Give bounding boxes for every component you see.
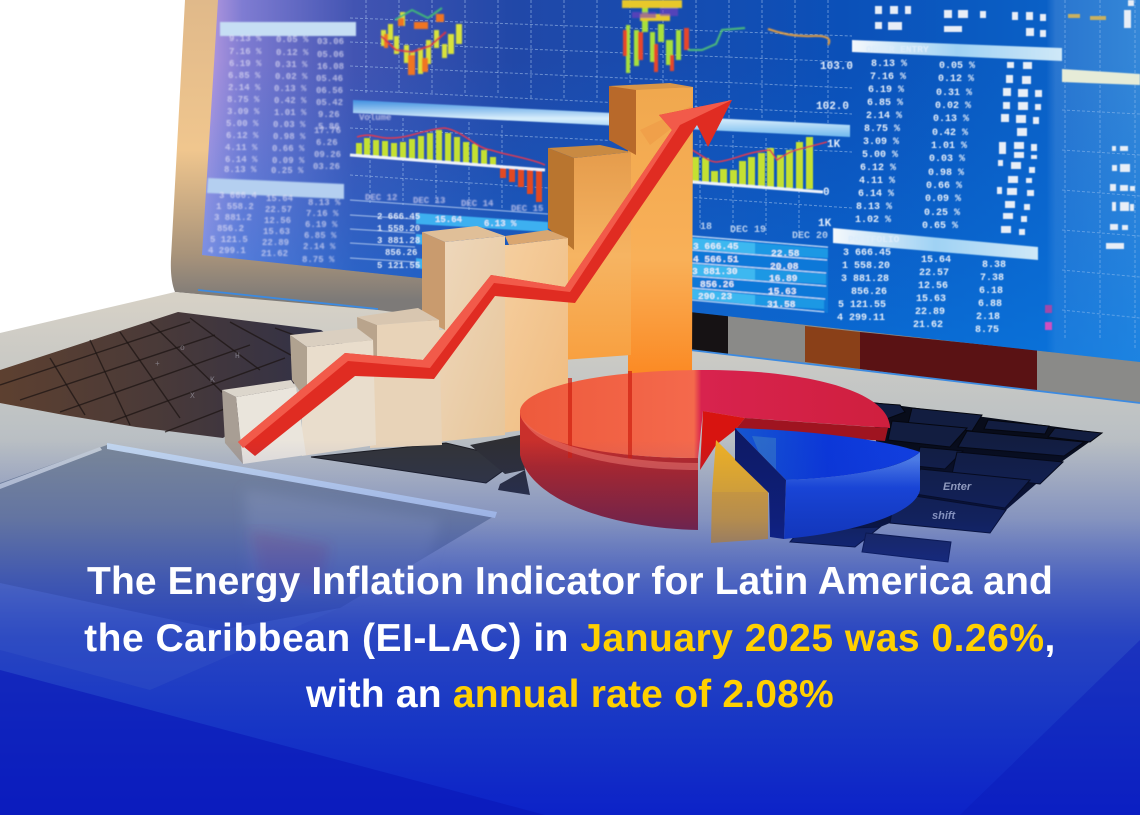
- trackpad: [0, 443, 497, 630]
- side table column: 0.09 %: [272, 156, 305, 166]
- order entry panel: 0.05 %: [939, 61, 975, 72]
- order entry panel: 0.98 %: [928, 168, 964, 179]
- side table column: 0.98 %: [273, 132, 306, 142]
- order entry panel: 8.13 %: [856, 202, 892, 213]
- side table column: 6.14 %: [225, 155, 258, 165]
- side table column: 1.01 %: [274, 108, 307, 118]
- side table column: 8.13 %: [308, 198, 341, 208]
- portfolio panel: 6.88: [978, 299, 1002, 310]
- side table column: 21.62: [261, 249, 288, 259]
- yellow slice: [711, 440, 768, 543]
- cyan data rows: 290.23: [698, 291, 733, 302]
- portfolio panel: 21.62: [913, 320, 943, 331]
- overlay diagonal facets: [0, 583, 1140, 815]
- side table column: 6.19 %: [229, 59, 262, 69]
- order entry panel: 5.00 %: [862, 150, 898, 161]
- portfolio panel: 8.38: [982, 260, 1006, 271]
- cyan data rows: 5 121.55: [377, 261, 420, 271]
- portfolio panel: 4 299.11: [837, 313, 885, 324]
- side table column: 4.11 %: [225, 143, 258, 153]
- keyboard left: [0, 312, 345, 438]
- headline: the Caribbean (EI-LAC) in January 2025 was 0.26%,: [84, 616, 1056, 660]
- portfolio panel: 3 666.45: [843, 248, 891, 259]
- portfolio panel: [833, 228, 1038, 336]
- side table column: 2.14 %: [228, 83, 261, 93]
- side table column: 22.57: [265, 205, 292, 215]
- portfolio panel: 8.75: [975, 325, 999, 336]
- side table column: 1 558.2: [216, 202, 254, 212]
- volume bar chart: [350, 128, 827, 202]
- side table column: 09.26: [314, 150, 341, 160]
- cyan data rows: 3 881.28: [377, 236, 420, 246]
- order entry panel: 3.09 %: [863, 137, 899, 148]
- axis labels: 103.0: [820, 61, 853, 73]
- order entry panel: 6.19 %: [868, 85, 904, 96]
- side table column: 06.56: [316, 86, 343, 96]
- axis labels: 102.0: [816, 101, 849, 113]
- cyan data rows: 15.64: [435, 215, 463, 225]
- portfolio panel: PORTFOLIO: [848, 234, 900, 245]
- side table column: 12.56: [264, 216, 291, 226]
- pie chart: [520, 370, 920, 543]
- axis labels: DEC 12: [365, 193, 397, 203]
- side table column: 16.08: [317, 62, 344, 72]
- portfolio panel: 15.63: [916, 294, 946, 305]
- bar 3: [357, 308, 442, 448]
- order entry panel: [852, 0, 1140, 330]
- side table column: 3 881.2: [214, 213, 252, 223]
- cyan data rows: 3 881.30: [692, 266, 738, 277]
- rising red arrow: [238, 100, 732, 456]
- order entry panel: 0.03 %: [929, 154, 965, 165]
- laptop lid: [171, 0, 1140, 420]
- order entry panel: 6.85 %: [867, 98, 903, 109]
- cyan data rows: 2 666.45: [377, 212, 420, 222]
- portfolio panel: 3 881.28: [841, 274, 889, 285]
- side table column: 9.13 %: [229, 34, 262, 44]
- side table column: 6.26: [316, 138, 338, 148]
- order entry panel: 4.11 %: [859, 176, 895, 187]
- axis labels: DEC 13: [413, 196, 445, 206]
- headline: The Energy Inflation Indicator for Latin America and: [87, 560, 1053, 603]
- side table column: 8.75 %: [302, 255, 335, 265]
- order entry panel: 0.09 %: [925, 194, 961, 205]
- portfolio panel: 856.26: [851, 287, 887, 298]
- cyan data rows: 6.13 %: [484, 219, 517, 229]
- order entry panel: 0.02 %: [935, 101, 971, 112]
- side table column: 8.75 %: [227, 95, 260, 105]
- candlestick clusters: [381, 0, 829, 75]
- side table column: 2.14 %: [303, 242, 336, 252]
- headline: with an annual rate of 2.08%: [306, 673, 834, 716]
- order entry panel: 8.13 %: [871, 59, 907, 70]
- keyboard spacebar: [311, 443, 518, 483]
- portfolio panel: 1 558.20: [842, 261, 890, 272]
- divider band: [353, 100, 850, 137]
- keyboard right: [790, 402, 1102, 547]
- bar 7: [609, 83, 693, 374]
- order entry panel: 8.75 %: [864, 124, 900, 135]
- side table column: 6.19 %: [305, 220, 338, 230]
- reflection band under screen: [690, 310, 1140, 403]
- side table column: 5 121.5: [210, 235, 248, 245]
- laptop base: [0, 292, 1140, 815]
- bar 4: [422, 226, 505, 442]
- order entry panel: 6.12 %: [860, 163, 896, 174]
- axis labels: Volume: [359, 113, 391, 123]
- keyboard left: H: [235, 352, 240, 361]
- keyboard right: Enter: [943, 481, 972, 493]
- chart grid: [350, 0, 1140, 350]
- laptop screen: [202, 0, 1140, 362]
- bar 6: [548, 145, 631, 360]
- side table column: 9.26: [318, 110, 340, 120]
- side table column: 856.2: [217, 224, 244, 234]
- order entry panel: 0.25 %: [924, 208, 960, 219]
- cyan data rows: 20.08: [770, 261, 799, 272]
- keyboard left: X: [190, 392, 195, 401]
- order entry panel: 2.14 %: [866, 111, 902, 122]
- bar 2: [290, 328, 376, 456]
- headline: [84, 560, 1056, 716]
- white data blocks: [875, 0, 1134, 235]
- portfolio panel: 7.38: [980, 273, 1004, 284]
- cyan data rows: 856.26: [700, 279, 735, 290]
- blue gradient overlay: [0, 440, 1140, 815]
- arrow key: [862, 533, 951, 562]
- order entry panel: 0.66 %: [926, 181, 962, 192]
- side table column: 0.31 %: [275, 60, 308, 70]
- side table column: 22.89: [262, 238, 289, 248]
- side table column: 3 666.4: [219, 191, 257, 201]
- order entry panel: 1.01 %: [931, 141, 967, 152]
- side table column: 4 299.1: [208, 246, 246, 256]
- order entry panel: ORDER ENTRY: [866, 44, 929, 55]
- order entry panel: 0.13 %: [933, 114, 969, 125]
- order entry panel: 0.31 %: [936, 88, 972, 99]
- side table column: 0.03 %: [273, 120, 306, 130]
- order entry panel: 0.12 %: [938, 74, 974, 85]
- axis labels: [359, 61, 853, 242]
- bar 1: [222, 380, 306, 464]
- blue slice: [735, 428, 920, 539]
- cyan data rows: 1 558.20: [377, 224, 420, 234]
- axis labels: DEC 19: [730, 225, 766, 236]
- order entry panel: 0.42 %: [932, 128, 968, 139]
- screen edge highlight: [198, 290, 1140, 403]
- side table column: 7.16 %: [229, 47, 262, 57]
- right panel band: [1062, 69, 1140, 85]
- axis labels: DEC 14: [461, 199, 494, 209]
- order entry panel: 0.65 %: [922, 221, 958, 232]
- side table column: 05.46: [316, 74, 343, 84]
- portfolio panel: 5 121.55: [838, 300, 886, 311]
- portfolio panel: 6.18: [979, 286, 1003, 297]
- cyan data rows: 16.89: [769, 273, 798, 284]
- side table column: 6.12 %: [226, 131, 259, 141]
- axis labels: 1K: [827, 139, 841, 151]
- side table column: 15.64: [266, 194, 294, 204]
- cyan data rows: [350, 200, 828, 313]
- portfolio panel: 22.57: [919, 268, 949, 279]
- side table column: 3.09 %: [227, 107, 260, 117]
- side table column: 03.26: [313, 162, 340, 172]
- axis labels: 18: [700, 222, 712, 233]
- cyan data rows: 856.26: [385, 248, 417, 258]
- side table column: 5.00 %: [226, 119, 259, 129]
- side table column: [207, 22, 356, 265]
- cyan data rows: 22.58: [771, 248, 800, 259]
- side table column: 0.12 %: [276, 48, 309, 58]
- side table column: 0.05 %: [276, 35, 309, 45]
- side table column: 17.76: [314, 126, 341, 136]
- portfolio panel: 22.89: [915, 307, 945, 318]
- side table column: 0.02 %: [275, 72, 308, 82]
- portfolio panel: 2.18: [976, 312, 1000, 323]
- side table column: 05.06: [317, 50, 344, 60]
- cyan data rows: 15.63: [768, 286, 797, 297]
- side table column: 0.13 %: [274, 84, 307, 94]
- side table column: 05.42: [316, 98, 343, 108]
- order entry panel: 1.02 %: [855, 215, 891, 226]
- portfolio panel: 15.64: [921, 255, 951, 266]
- side table column: 15.63: [263, 227, 290, 237]
- keyboard left: +: [155, 360, 160, 369]
- red slice: [520, 370, 890, 530]
- cyan data rows: 4 566.51: [693, 254, 739, 265]
- side table column: 5.86: [318, 122, 340, 132]
- side table column: 0.66 %: [272, 144, 305, 154]
- keyboard left: K: [210, 376, 215, 385]
- order entry panel: 6.14 %: [858, 189, 894, 200]
- cyan data rows: 31.58: [767, 299, 796, 310]
- axis labels: DEC 20: [792, 231, 828, 242]
- axis labels: DEC 15: [511, 204, 543, 214]
- cyan data rows: 3 666.45: [693, 241, 739, 252]
- axis labels: 1K: [818, 218, 832, 230]
- axis labels: 0: [823, 187, 830, 199]
- side table column: 6.85 %: [228, 71, 261, 81]
- order entry panel: 7.16 %: [870, 72, 906, 83]
- side table column: 8.13 %: [224, 165, 257, 175]
- side table column: 0.42 %: [274, 96, 307, 106]
- bar 5: [500, 230, 568, 433]
- portfolio panel: 12.56: [918, 281, 948, 292]
- keyboard right: shift: [932, 510, 957, 522]
- side table column: 6.85 %: [304, 231, 337, 241]
- keyboard left: o: [180, 344, 185, 353]
- 3D bar chart: [222, 83, 693, 464]
- side table column: 03.06: [317, 37, 344, 47]
- side table column: 0.25 %: [271, 166, 304, 176]
- side table column: 7.16 %: [306, 209, 339, 219]
